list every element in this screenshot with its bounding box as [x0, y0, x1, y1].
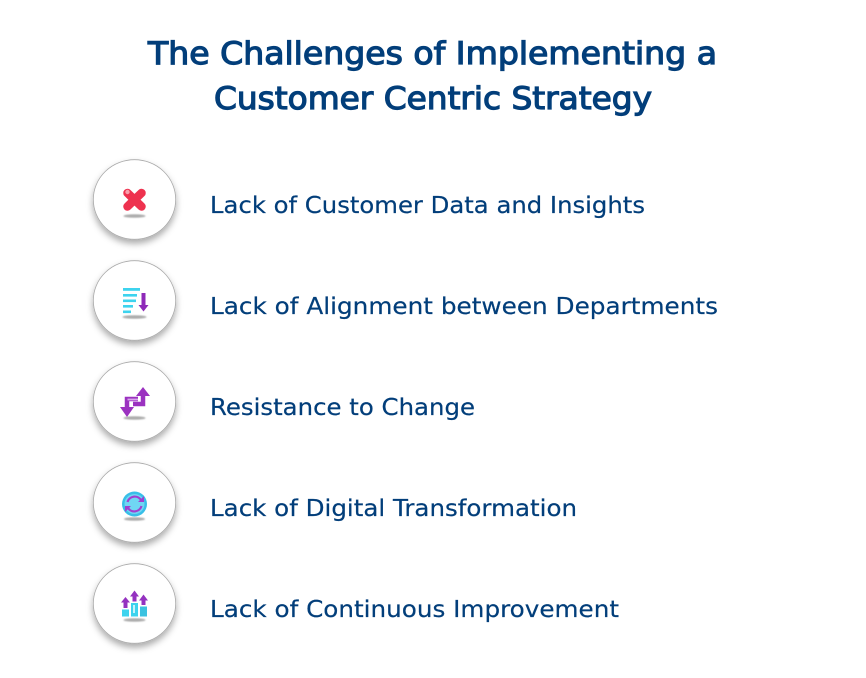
- label 2: Lack of Alignment between Departments: [210, 292, 718, 320]
- label 3: Resistance to Change: [210, 393, 475, 421]
- label 1: Lack of Customer Data and Insights: [210, 191, 645, 219]
- circle badge 3: [93, 362, 176, 441]
- item 5: lack of continuous improvement: [93, 564, 619, 643]
- icon: refresh globe: [122, 492, 147, 521]
- circle badge 1: [93, 160, 176, 239]
- title: Customer Centric Strategy: [214, 81, 652, 117]
- item 4: lack of digital transformation: [93, 463, 577, 542]
- circle badge 5: [93, 564, 176, 643]
- label 4: Lack of Digital Transformation: [210, 494, 577, 522]
- item 1: lack of customer data: [93, 160, 645, 239]
- icon: rising bars with arrows: [121, 590, 148, 622]
- label 5: Lack of Continuous Improvement: [210, 595, 619, 623]
- circle badge 2: [93, 261, 176, 340]
- title: [147, 36, 717, 117]
- icon: sorted list with down arrow: [122, 288, 148, 319]
- icon: red cross: [124, 190, 146, 218]
- icon: opposing purple arrows: [120, 387, 150, 420]
- title: The Challenges of Implementing a: [147, 36, 717, 72]
- item 2: lack of alignment: [93, 261, 718, 340]
- circle badge 4: [93, 463, 176, 542]
- item 3: resistance to change: [93, 362, 475, 441]
